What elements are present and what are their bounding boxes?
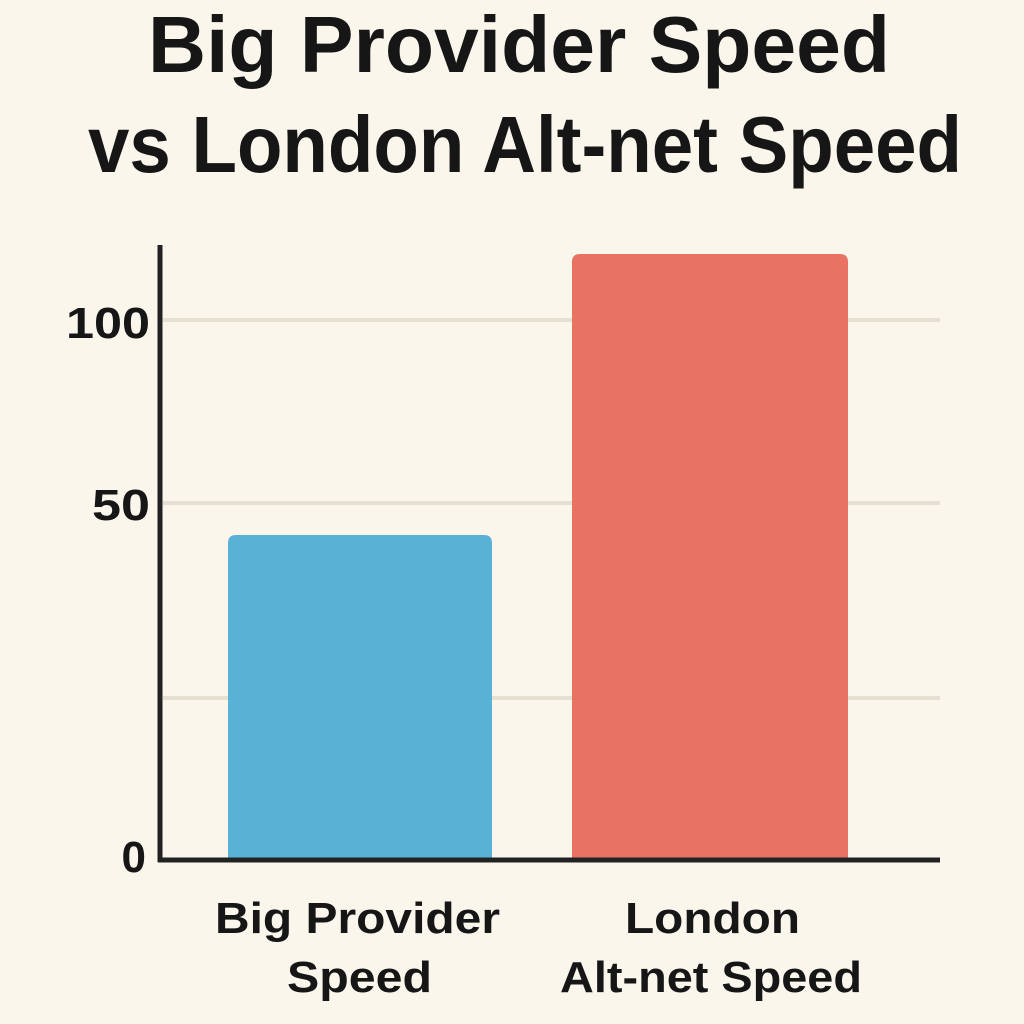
title — [88, 0, 962, 189]
y-axis labels: 50 — [92, 481, 150, 530]
y-axis labels: 100 — [66, 299, 150, 348]
x-axis label: Big Provider Speed: Big Provider — [215, 894, 500, 943]
bar: London Alt-net Speed — [572, 254, 848, 860]
x-axis label: London Alt-net Speed: London — [625, 894, 800, 943]
title: vs London Alt-net Speed — [88, 100, 962, 189]
y-axis labels — [66, 299, 150, 882]
title: Big Provider Speed — [148, 0, 890, 89]
x-axis label: London Alt-net Speed — [560, 894, 862, 1002]
x-axis label: Big Provider Speed — [215, 894, 500, 1002]
bar: Big Provider Speed — [228, 535, 492, 860]
x-axis label: Big Provider Speed: Speed — [287, 953, 432, 1002]
y-axis labels: 0 — [122, 833, 146, 882]
axes — [158, 245, 940, 862]
x-axis label: London Alt-net Speed: Alt-net Speed — [560, 953, 862, 1002]
